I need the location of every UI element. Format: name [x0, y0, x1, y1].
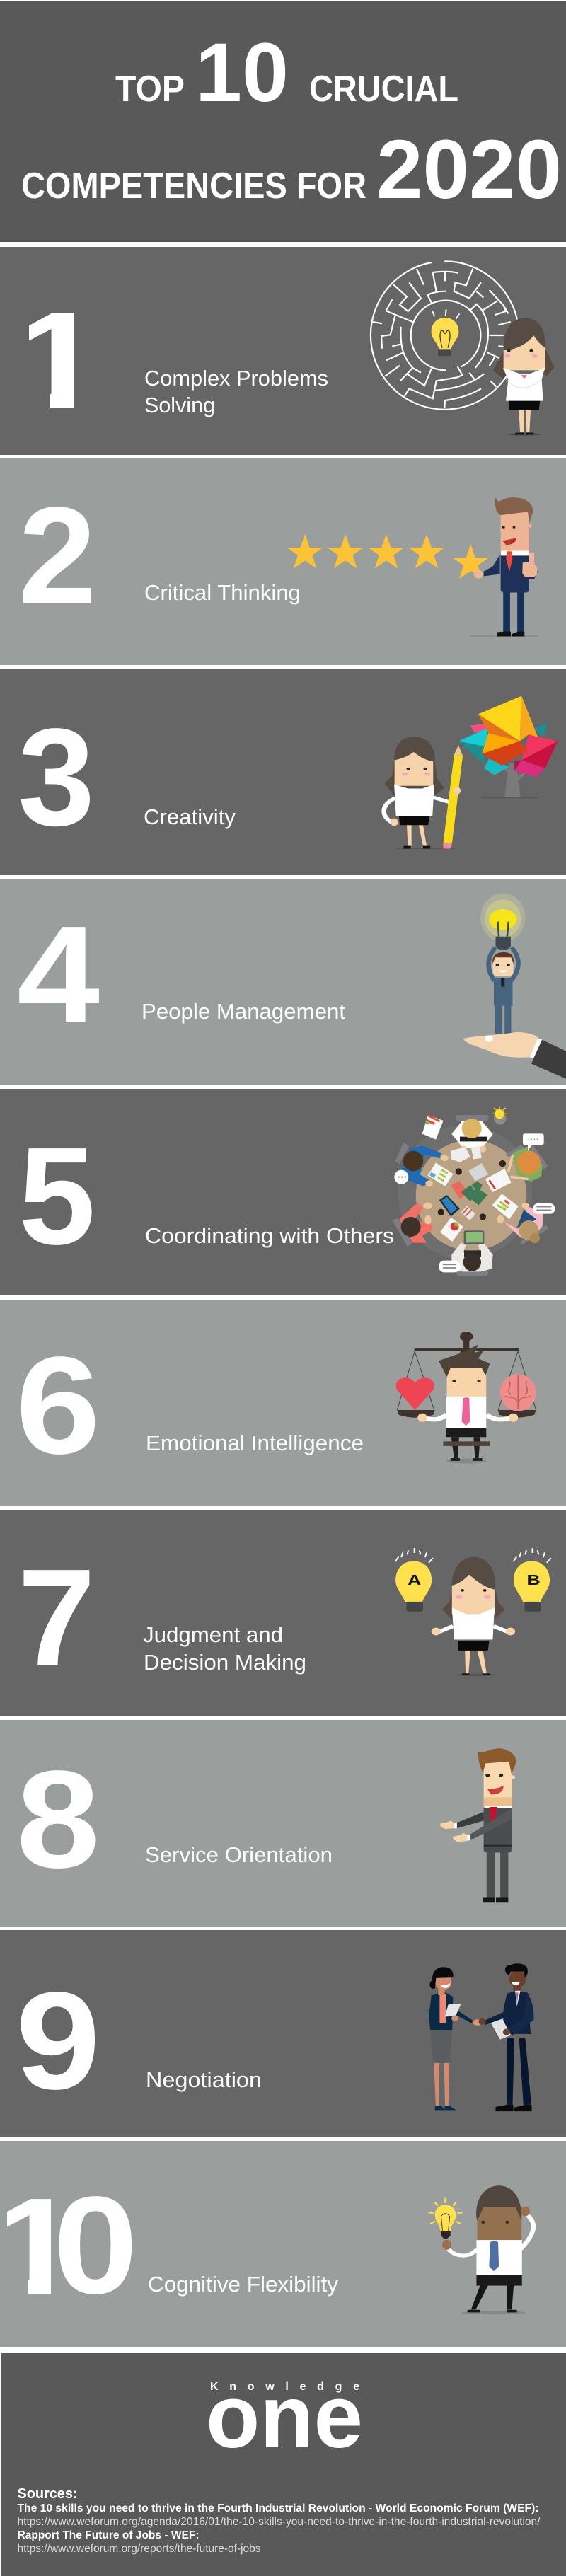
label — [143, 1622, 306, 1675]
title line 2: COMPETENCIES FOR — [21, 166, 366, 207]
figure: man — [485, 1963, 534, 2111]
icon: man with idea bulb — [429, 2185, 533, 2314]
icon: meeting table seen from above — [393, 1106, 555, 1276]
figure: man — [417, 1344, 518, 1461]
person top — [451, 1119, 493, 1153]
number 7: 7 — [18, 1540, 96, 1695]
icon: bulb A: A — [408, 1572, 421, 1588]
label: Negotiation — [146, 2067, 262, 2092]
label — [144, 366, 328, 417]
panel: title header — [0, 1, 566, 242]
sources text — [17, 2486, 541, 2555]
number 4: 4 — [17, 897, 100, 1052]
logo: Knowledge one: Knowledge — [210, 2381, 359, 2393]
icon: balance scale — [397, 1332, 536, 1418]
figure: woman — [493, 318, 555, 436]
icon: woman with pencil and polygon tree — [384, 696, 558, 849]
panel: 3 creativity — [0, 669, 566, 875]
number 1: 1 — [13, 283, 105, 438]
person bottom — [439, 1243, 493, 1272]
title line 1: TOP — [115, 69, 185, 110]
label: People Management — [142, 999, 345, 1024]
label: Cognitive Flexibility — [148, 2272, 338, 2297]
label: Solving — [144, 393, 215, 417]
panel: 5 coordinating with others — [0, 1089, 566, 1295]
sources text: https://www.weforum.org/reports/the-future-of-jobs — [17, 2543, 261, 2555]
icon: stars — [287, 534, 489, 579]
icon: bulb A — [395, 1548, 433, 1612]
icon: small bulb — [492, 1106, 507, 1124]
icon: five stars and businessman — [287, 497, 538, 637]
label: Complex Problems — [144, 366, 328, 391]
figure: woman with pencil — [384, 737, 463, 849]
panel: footer with logo and sources — [1, 2353, 566, 2576]
label: Coordinating with Others — [145, 1223, 394, 1248]
panel: 2 critical thinking — [0, 458, 566, 665]
icon: polygon tree — [458, 696, 558, 798]
icon: glowing bulb — [480, 894, 525, 950]
figure: woman — [432, 1557, 515, 1676]
figure: woman — [429, 1967, 473, 2110]
table — [416, 1140, 526, 1251]
person left — [394, 1145, 449, 1186]
title line 1: CRUCIAL — [309, 69, 458, 110]
icon: bulb B: B — [526, 1572, 541, 1588]
icon: hand holding man with bulb — [463, 894, 566, 1079]
icon: light bulb — [432, 309, 459, 356]
label: Decision Making — [144, 1650, 306, 1675]
icon: open hand and sleeve — [463, 1032, 566, 1079]
person right — [508, 1133, 544, 1182]
sources text: The 10 skills you need to thrive in the Fourth Industrial Revolution - World Economic Forum (WEF): — [17, 2502, 539, 2514]
number 3: 3 — [18, 700, 95, 855]
logo: Knowledge one: one — [206, 2367, 363, 2466]
number 6: 6 — [16, 1328, 100, 1483]
figure: two people shaking hands — [429, 1963, 534, 2111]
icon: maze with bulb and woman — [371, 261, 555, 436]
sources text: Sources: — [17, 2486, 78, 2502]
icon: idea bulb — [429, 2198, 463, 2239]
icon: brain — [500, 1374, 536, 1411]
plant — [461, 1181, 487, 1205]
panel: 10 cognitive flexibility — [0, 2141, 566, 2347]
person lower right — [497, 1203, 555, 1243]
panel: 7 judgment and decision making — [0, 1510, 566, 1716]
number 10: 0 — [53, 2168, 138, 2323]
title line 2: 2020 — [376, 123, 562, 216]
icon: heart — [396, 1377, 434, 1410]
number 9: 9 — [16, 1963, 100, 2118]
number 5: 5 — [18, 1119, 96, 1273]
number 8: 8 — [16, 1742, 100, 1897]
label: Critical Thinking — [144, 580, 301, 605]
label: Judgment and — [143, 1622, 283, 1647]
label: Creativity — [144, 804, 236, 829]
icon: man balancing heart and brain — [396, 1332, 536, 1463]
figure: thinking man — [442, 2185, 533, 2312]
title line 1 — [115, 26, 458, 120]
panel: 8 service orientation — [0, 1720, 566, 1927]
icon: bulb B — [514, 1548, 551, 1612]
figure: businessman — [469, 497, 538, 637]
person lower left — [399, 1203, 433, 1243]
figure: welcoming businessman — [440, 1748, 516, 1902]
number 10 — [7, 2196, 132, 2294]
panel: 9 negotiation — [0, 1930, 566, 2137]
panel: 4 people management — [0, 879, 566, 1085]
number 2: 2 — [18, 478, 96, 633]
handshake — [473, 2018, 485, 2026]
label: Service Orientation — [145, 1842, 333, 1867]
papers on table — [422, 1114, 519, 1244]
sources text: Rapport The Future of Jobs - WEF: — [17, 2529, 200, 2541]
chairs — [393, 1115, 548, 1276]
panel: 6 emotional intelligence — [0, 1300, 566, 1506]
panel: 1 complex problems solving — [0, 247, 566, 455]
title line 2 — [21, 123, 562, 216]
figure: small man — [488, 947, 519, 1034]
sources text: https://www.weforum.org/agenda/2016/01/the-10-skills-you-need-to-thrive-in-the-fourth-industrial-revolution/ — [17, 2516, 541, 2528]
icon: woman choosing between bulbs A and B — [395, 1548, 551, 1676]
title line 1: 10 — [195, 26, 289, 120]
label: Emotional Intelligence — [146, 1431, 364, 1455]
